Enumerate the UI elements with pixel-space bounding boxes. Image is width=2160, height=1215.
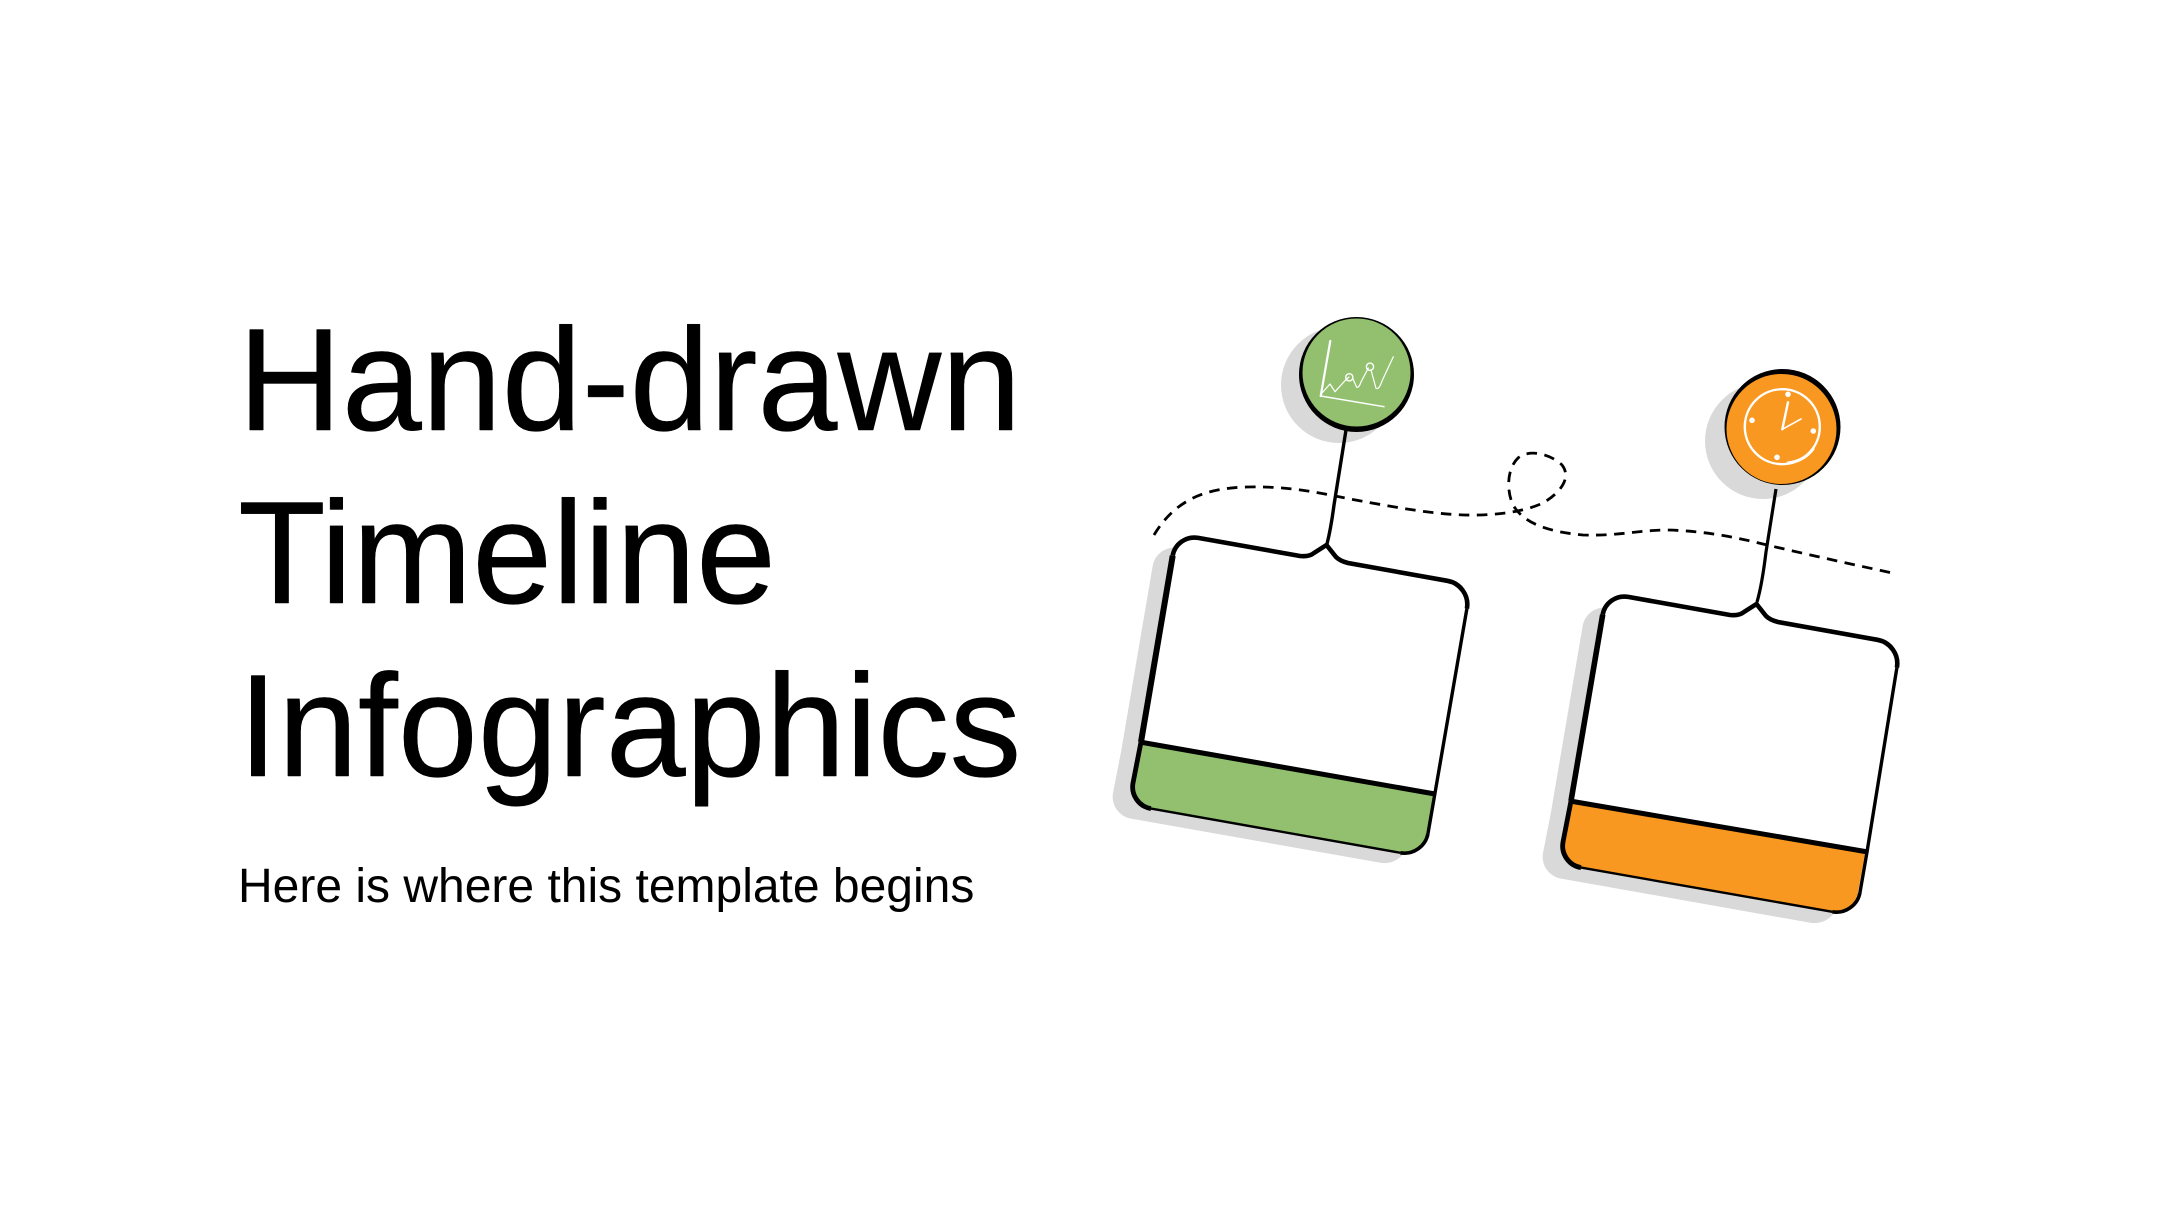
timeline item: orange card xyxy=(1543,369,1897,923)
circle outline xyxy=(1299,317,1414,432)
orange circle xyxy=(1726,374,1836,484)
card body xyxy=(1133,538,1467,853)
orange band xyxy=(1563,802,1865,912)
dashed timeline path xyxy=(1154,453,1897,574)
card shadow xyxy=(1113,548,1447,863)
title: Timeline xyxy=(238,471,776,634)
title: Hand-drawn xyxy=(238,298,1021,461)
green band xyxy=(1133,743,1435,853)
icon: clock xyxy=(1745,389,1820,464)
connector line xyxy=(1757,489,1776,602)
subtitle: Here is where this template begins xyxy=(238,860,974,913)
card shadow xyxy=(1543,608,1877,923)
circle outline xyxy=(1724,369,1840,485)
title xyxy=(238,298,1021,807)
timeline item: green card xyxy=(1113,317,1467,863)
card body xyxy=(1563,597,1897,912)
shadow of orange circle xyxy=(1705,383,1821,499)
shadow of green circle xyxy=(1281,327,1397,443)
connector line xyxy=(1327,430,1346,544)
icon: line chart xyxy=(1321,341,1393,407)
title: Infographics xyxy=(238,644,1021,807)
green circle xyxy=(1302,318,1410,426)
card outline xyxy=(1133,538,1467,853)
card outline xyxy=(1563,597,1897,912)
